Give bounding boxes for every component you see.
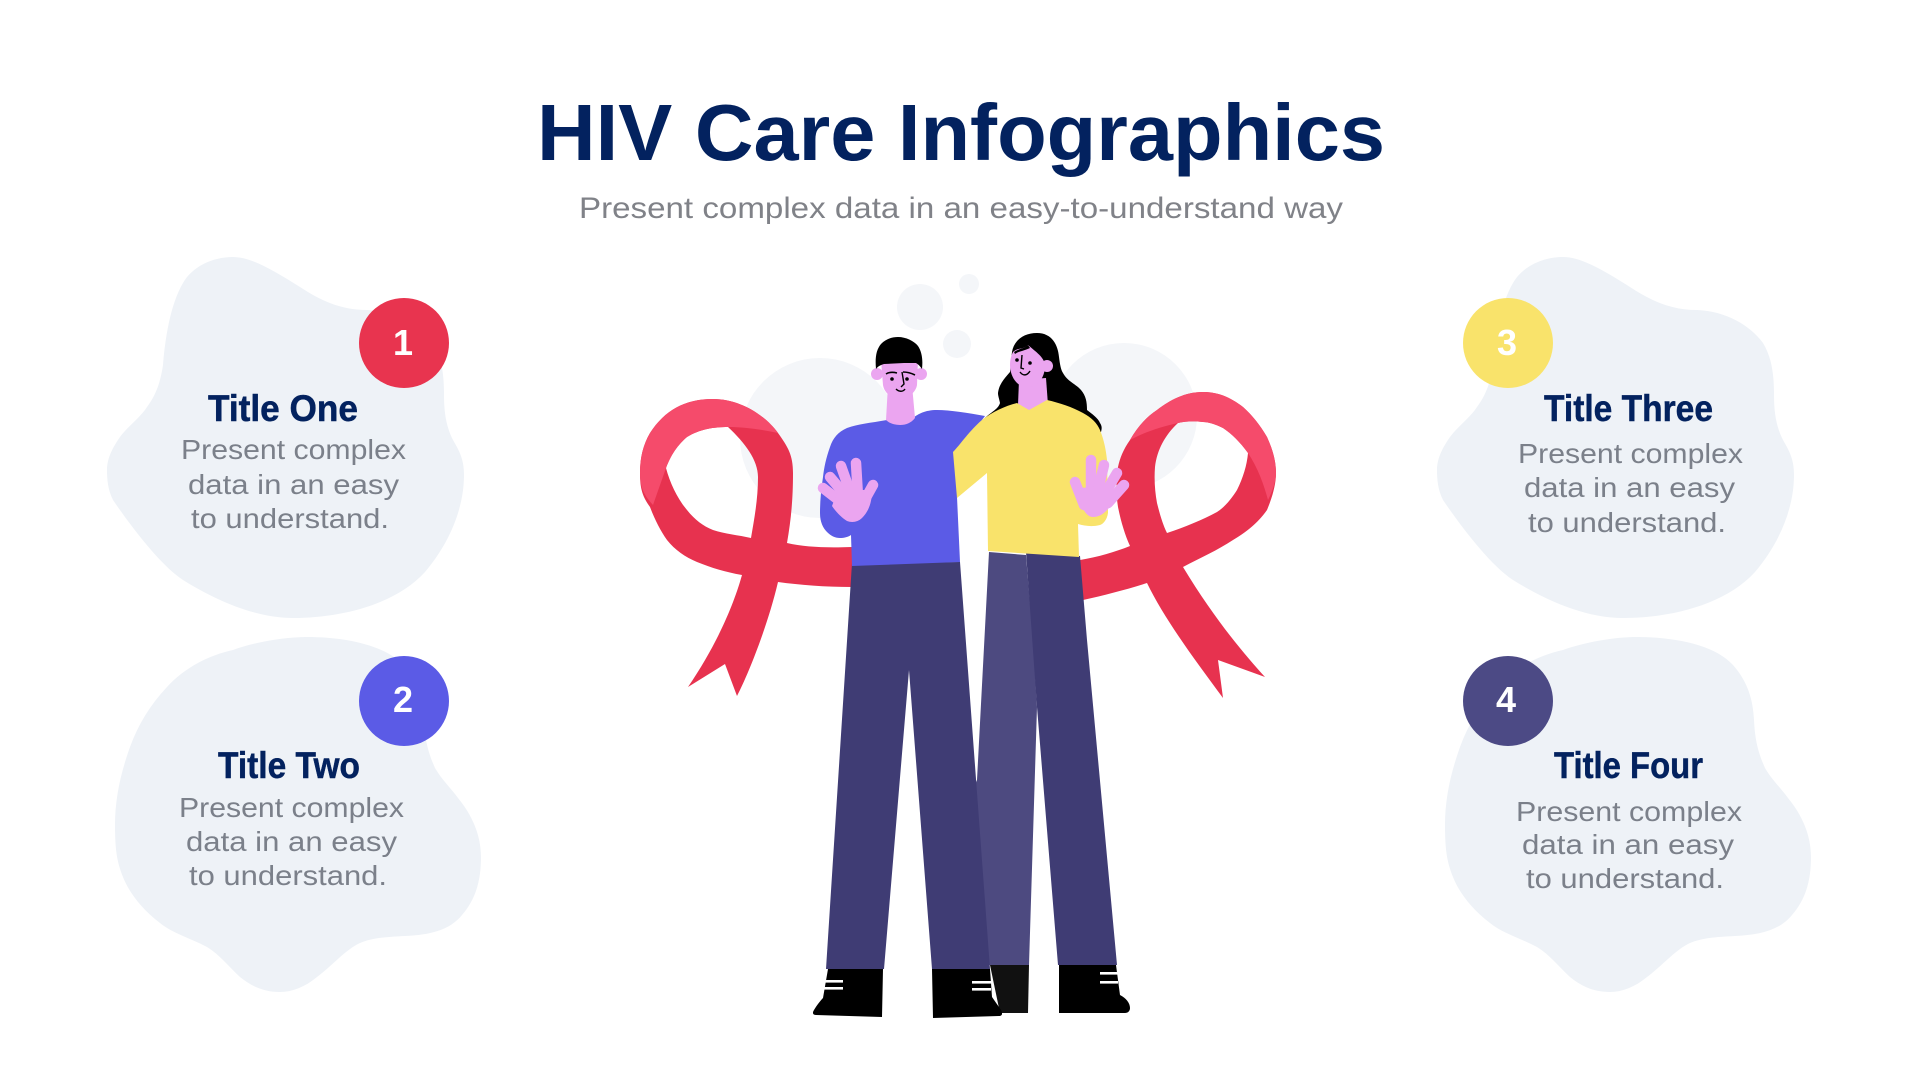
woman [973, 333, 1130, 1013]
man head [871, 337, 927, 399]
body text: Present complex [181, 434, 406, 465]
number badge 2: 2 [393, 679, 413, 720]
panel background blob [107, 257, 464, 618]
panel: title three [1437, 257, 1794, 618]
body text: data in an easy [1524, 472, 1735, 503]
panel: title two [115, 637, 481, 992]
woman back leg [973, 552, 1037, 965]
body text: data in an easy [1522, 829, 1734, 860]
right red ribbon [1080, 392, 1276, 698]
man raised hand [823, 463, 873, 522]
panel: title one [107, 257, 464, 618]
body text [179, 792, 404, 891]
heading: Title Three [1544, 388, 1713, 429]
man right shoe [932, 969, 1002, 1018]
body text: to understand. [1526, 863, 1724, 894]
man sweater [820, 410, 985, 566]
body text: Present complex [1518, 438, 1743, 469]
body text: to understand. [1528, 507, 1726, 538]
body text: Present complex [1516, 796, 1742, 827]
title: HIV Care Infographics [537, 88, 1385, 177]
body text: to understand. [189, 860, 387, 891]
number badge 4 [1463, 656, 1553, 746]
body text: data in an easy [188, 469, 399, 500]
woman yellow sweater with arm around man [953, 400, 1108, 557]
man legs [826, 562, 990, 969]
background bubbles [740, 274, 1197, 518]
body text: Present complex [179, 792, 404, 823]
panel background blob [1437, 257, 1794, 618]
woman hair [982, 333, 1102, 432]
body text: data in an easy [186, 826, 397, 857]
number badge 2 [359, 656, 449, 746]
number badge 1: 1 [393, 322, 413, 363]
man [813, 337, 1002, 1018]
woman front leg [1026, 552, 1117, 965]
heading: Title One [208, 388, 358, 429]
panel background blob [1445, 637, 1811, 992]
woman neck [1018, 378, 1048, 415]
woman face [1010, 345, 1053, 387]
woman raised hand [1075, 460, 1124, 517]
man neck [886, 385, 915, 425]
woman back shoe [990, 965, 1029, 1013]
number badge 4: 4 [1496, 679, 1516, 720]
body text [1516, 796, 1742, 894]
panel background blob [115, 637, 481, 992]
body text: to understand. [191, 503, 389, 534]
woman front shoe [1059, 965, 1130, 1013]
subtitle: Present complex data in an easy-to-understand way [579, 192, 1343, 225]
body text [1518, 438, 1743, 538]
left red ribbon [640, 399, 852, 696]
panel: title four [1445, 637, 1811, 992]
number badge 3 [1463, 298, 1553, 388]
heading: Title Four [1554, 745, 1703, 786]
heading: Title Two [218, 745, 360, 786]
number badge 1 [359, 298, 449, 388]
central illustration: couple with red ribbons [640, 274, 1276, 1018]
man left shoe [813, 969, 883, 1017]
number badge 3: 3 [1497, 322, 1517, 363]
body text [181, 434, 406, 534]
